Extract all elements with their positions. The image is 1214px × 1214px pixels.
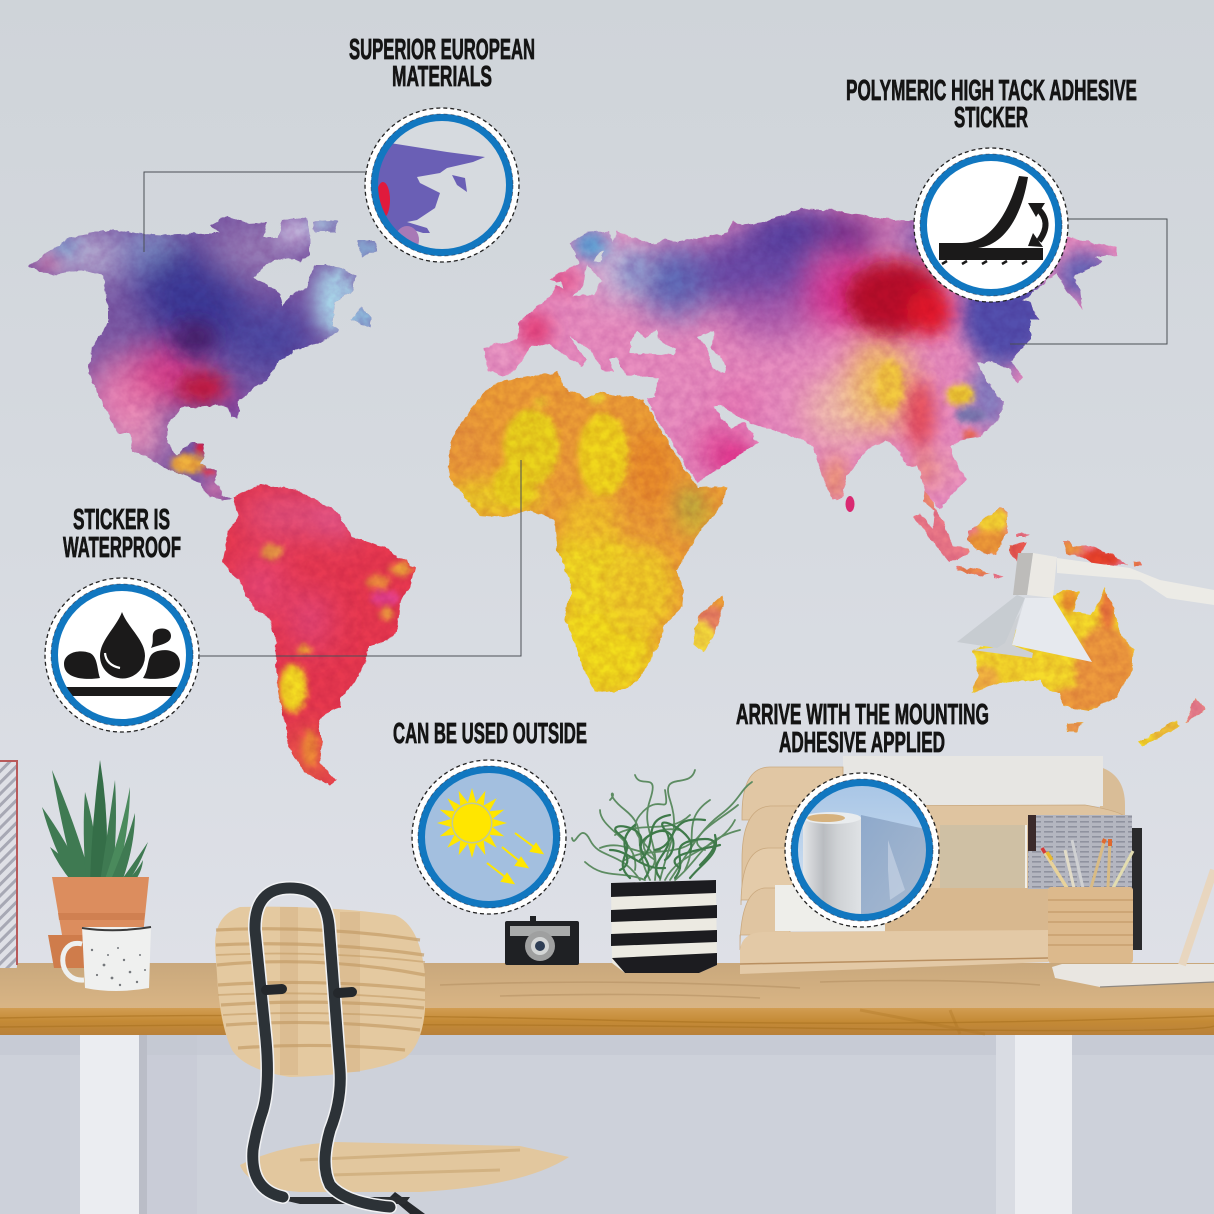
badge: superior european materials xyxy=(365,108,519,262)
right desk leg xyxy=(996,1035,1072,1214)
icon: sun with rays xyxy=(437,788,507,858)
left desk leg xyxy=(80,1035,147,1214)
heading: polymeric adhesive xyxy=(846,75,1137,134)
black tablet behind notebook xyxy=(1125,828,1142,950)
connector line: materials xyxy=(144,172,365,252)
paper lamp xyxy=(957,553,1214,662)
heading: waterproof xyxy=(63,504,181,564)
heading: waterproof: STICKER IS xyxy=(73,504,170,536)
world map: North America xyxy=(28,216,378,501)
map detail in badge xyxy=(378,144,485,244)
heading: outdoor: CAN BE USED OUTSIDE xyxy=(393,718,587,750)
pencil cup with pencils xyxy=(1042,839,1133,963)
speckled enamel mug xyxy=(63,927,151,991)
wooden frame at right xyxy=(1182,870,1214,965)
heading: superior european materials: MATERIALS xyxy=(392,61,492,93)
icon: sun arrows xyxy=(487,833,542,883)
chair back xyxy=(215,907,425,1077)
chair metal frame xyxy=(253,888,390,1207)
icon: peeling sticker xyxy=(939,176,1046,264)
heading: mounting adhesive xyxy=(736,699,989,759)
lower wall under desk xyxy=(0,1035,1214,1214)
squiggly grass plant xyxy=(572,770,752,880)
desk surface xyxy=(0,963,1214,1009)
photo of adhesive roll xyxy=(795,785,930,915)
heading: superior european materials: SUPERIOR EUROPEAN xyxy=(349,34,535,66)
badge: outdoor use xyxy=(412,760,566,914)
desk front edge xyxy=(0,1008,1214,1035)
wooden organizer xyxy=(740,767,1125,974)
notebook xyxy=(1028,815,1132,889)
heading: polymeric adhesive: STICKER xyxy=(954,102,1028,134)
world map: Africa and Madagascar xyxy=(440,365,735,700)
right back panel and rear board of organizer xyxy=(843,756,1125,830)
heading: mounting adhesive: ADHESIVE APPLIED xyxy=(779,727,945,759)
world map: Indonesia and New Guinea xyxy=(913,491,1142,579)
connector line: waterproof xyxy=(200,460,521,656)
heading: superior european materials xyxy=(349,34,535,93)
world map: Eurasia xyxy=(484,208,1118,510)
chair seat xyxy=(240,1142,569,1214)
left striped book xyxy=(0,760,18,968)
world map: Australia and New Zealand xyxy=(972,587,1206,746)
connector line: adhesive xyxy=(1010,219,1167,344)
badge: waterproof xyxy=(45,578,199,732)
aloe plant xyxy=(42,760,148,882)
terracotta pot xyxy=(48,877,149,968)
world map: South America xyxy=(215,480,420,790)
icon: water drops xyxy=(64,612,180,696)
camera xyxy=(505,916,579,965)
badge: adhesive xyxy=(914,148,1068,302)
heading: waterproof: WATERPROOF xyxy=(63,532,181,564)
heading: mounting adhesive: ARRIVE WITH THE MOUNTING xyxy=(736,699,989,731)
papers stack on desk xyxy=(1052,964,1214,987)
badge: mounting adhesive xyxy=(785,773,939,927)
Sri Lanka xyxy=(846,496,854,512)
striped knitted basket xyxy=(611,880,717,973)
